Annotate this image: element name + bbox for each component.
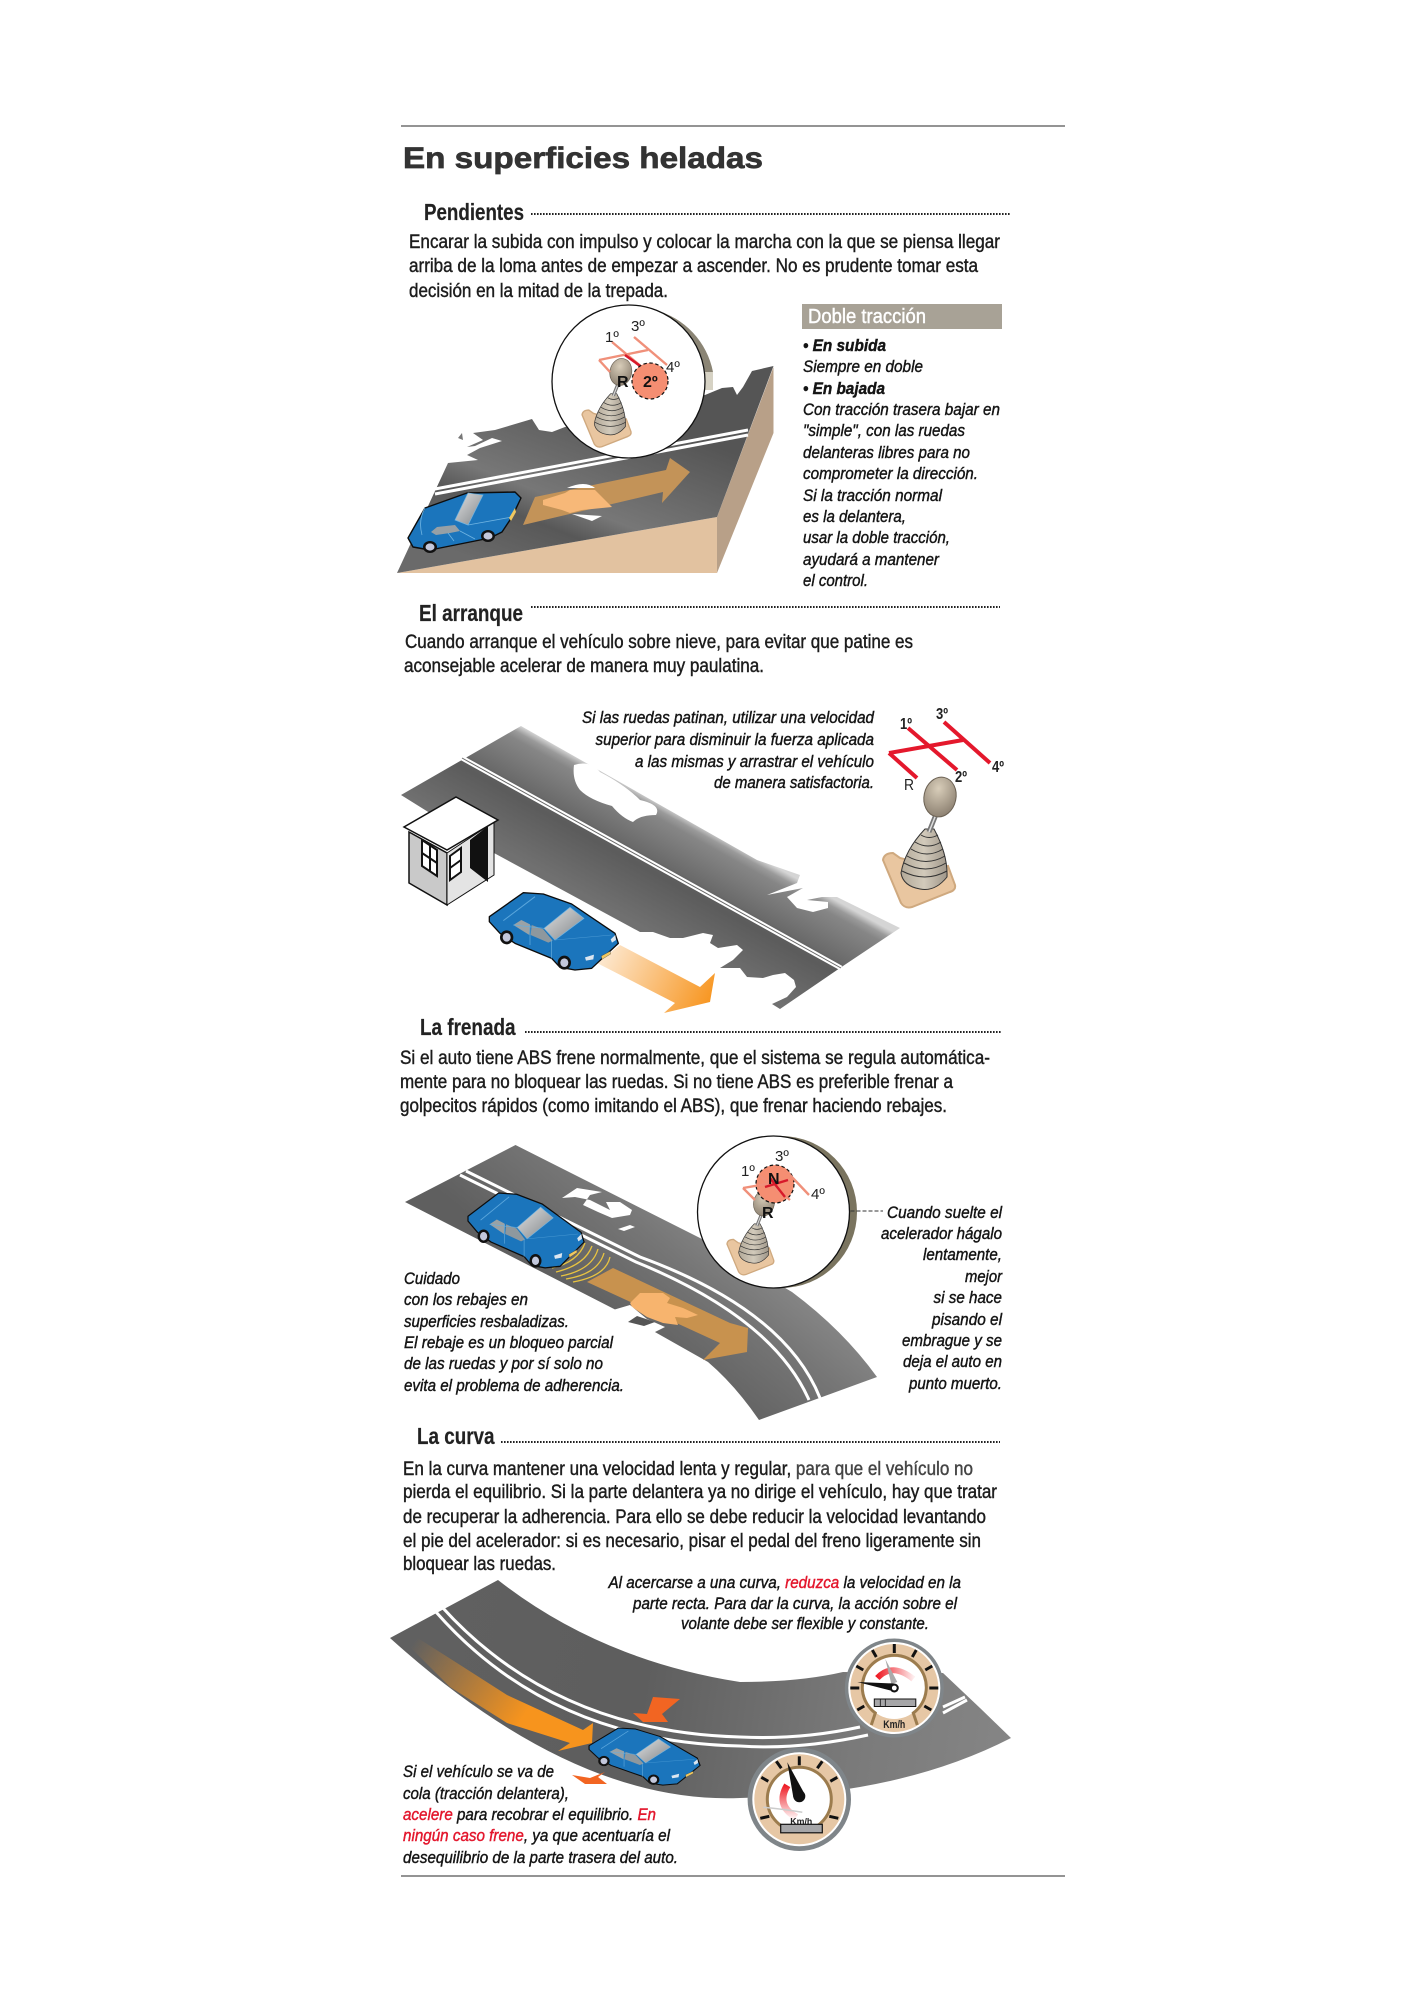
diagram: gear pattern: 2º bbox=[955, 769, 967, 786]
text block: el arranque bbox=[404, 632, 913, 677]
callout: clutch advice bbox=[881, 1204, 1003, 1393]
icon: gear shifter bbox=[883, 774, 960, 908]
text block: la frenada: mente para no bloquear las ruedas. Si no tiene ABS es preferible frenar a bbox=[400, 1072, 953, 1093]
text block: la curva: el pie del acelerador: si es necesario, pisar el pedal del freno ligeramente sin bbox=[403, 1531, 981, 1552]
arrow: braking path bbox=[587, 1268, 748, 1360]
magnifier: neutral gear: R bbox=[762, 1205, 774, 1222]
text block: la frenada bbox=[400, 1048, 990, 1117]
text block: pendientes: decisión en la mitad de la trepada. bbox=[409, 281, 668, 302]
text block: la curva: pierda el equilibrio. Si la parte delantera ya no dirige el vehículo, hay que tratar bbox=[403, 1482, 998, 1503]
diagram: gear pattern: 1º bbox=[900, 716, 912, 733]
callout: clutch advice: embrague y se bbox=[902, 1332, 1002, 1350]
text block: la frenada: Si el auto tiene ABS frene normalmente, que el sistema se regula automática- bbox=[400, 1048, 990, 1069]
magnifier: gearshift second gear: 3º bbox=[631, 318, 645, 335]
arrow: forward motion bbox=[597, 945, 715, 1013]
text block: la curva: En la curva mantener una velocidad lenta y regular, para que el vehículo no bbox=[403, 1459, 973, 1480]
arrow: side force bottom bbox=[572, 1772, 607, 1784]
sidebar text bbox=[803, 337, 1000, 590]
illustration: road curve bbox=[390, 1580, 1011, 1798]
callout: clutch advice: punto muerto. bbox=[908, 1375, 1002, 1393]
sidebar text: "simple", con las ruedas bbox=[803, 422, 965, 440]
heading: pendientes: Pendientes bbox=[424, 199, 524, 225]
sidebar text: comprometer la dirección. bbox=[803, 465, 978, 483]
sidebar text: es la delantera, bbox=[803, 508, 906, 526]
magnifier: neutral gear bbox=[698, 1136, 857, 1288]
callout: rear slide: Si el vehículo se va de bbox=[403, 1763, 554, 1781]
arrow: slope direction bbox=[523, 458, 690, 525]
icon: blue car bbox=[589, 1728, 700, 1785]
callout: downshift warning: El rebaje es un bloqueo parcial bbox=[404, 1334, 614, 1352]
callout: downshift warning: con los rebajes en bbox=[404, 1291, 528, 1309]
callout: rear slide: desequilibrio de la parte trasera del auto. bbox=[403, 1849, 678, 1867]
callout: rear slide: acelere para recobrar el equilibrio. En bbox=[403, 1806, 656, 1824]
icon: blue car bbox=[408, 492, 521, 553]
magnifier: neutral gear: 3º bbox=[775, 1148, 789, 1165]
text block: pendientes bbox=[409, 232, 1001, 302]
diagram: gear pattern bbox=[883, 706, 1004, 908]
heading: la frenada: La frenada bbox=[420, 1014, 516, 1040]
callout: approaching curve bbox=[608, 1574, 961, 1633]
callout: downshift warning: de las ruedas y por sí solo no bbox=[404, 1355, 603, 1373]
callout: rear slide bbox=[403, 1763, 678, 1867]
callout: downshift warning: evita el problema de adherencia. bbox=[404, 1377, 624, 1395]
text block: pendientes: arriba de la loma antes de empezar a ascender. No es prudente tomar esta bbox=[409, 256, 978, 277]
gauge: speedometer accelerating: Km/h bbox=[790, 1816, 812, 1826]
arrow: side force top bbox=[633, 1697, 680, 1722]
callout: clutch advice: acelerador hágalo bbox=[881, 1225, 1002, 1243]
sidebar text: • En subida bbox=[803, 337, 886, 355]
magnifier: neutral gear: 4º bbox=[811, 1186, 825, 1203]
panel: la frenada bbox=[400, 1014, 1003, 1420]
sidebar text: • En bajada bbox=[803, 380, 885, 398]
callout: wheels spinning: superior para disminuir la fuerza aplicada bbox=[596, 731, 874, 749]
callout: approaching curve: parte recta. Para dar la curva, la acción sobre el bbox=[632, 1595, 958, 1613]
text block: la curva: de recuperar la adherencia. Para ello se debe reducir la velocidad levantando bbox=[403, 1507, 986, 1528]
icon: guard booth bbox=[404, 797, 498, 905]
text block: la curva bbox=[403, 1459, 998, 1575]
text block: pendientes: Encarar la subida con impulso y colocar la marcha con la que se piensa llegar bbox=[409, 232, 1001, 253]
text block: el arranque: aconsejable acelerar de manera muy paulatina. bbox=[404, 656, 764, 677]
icon: blue car bbox=[468, 1193, 584, 1268]
magnifier: gearshift second gear: 4º bbox=[666, 359, 680, 376]
magnifier: gearshift second gear: 1º bbox=[605, 329, 619, 346]
gauge: speedometer slowing bbox=[845, 1638, 944, 1738]
callout: clutch advice: mejor bbox=[965, 1268, 1003, 1286]
sidebar text: el control. bbox=[803, 572, 868, 590]
illustration: curving road bbox=[405, 1145, 877, 1420]
sidebar text: delanteras libres para no bbox=[803, 444, 970, 462]
text block: la curva: bloquear las ruedas. bbox=[403, 1554, 556, 1575]
callout: clutch advice: si se hace bbox=[934, 1289, 1002, 1307]
sidebar header: Doble tracción bbox=[808, 306, 926, 328]
sidebar text: ayudará a mantener bbox=[803, 551, 940, 569]
heading: la curva: La curva bbox=[417, 1423, 495, 1449]
title: En superficies heladas bbox=[403, 142, 763, 175]
magnifier: neutral gear: 1º bbox=[741, 1163, 755, 1180]
text block: el arranque: Cuando arranque el vehículo sobre nieve, para evitar que patine es bbox=[405, 632, 913, 653]
callout: rear slide: cola (tracción delantera), bbox=[403, 1785, 569, 1803]
magnifier: gearshift second gear bbox=[552, 305, 713, 458]
arrow: skid direction bbox=[410, 1635, 593, 1751]
magnifier: neutral gear: N bbox=[768, 1171, 780, 1188]
callout: clutch advice: lentamente, bbox=[923, 1246, 1002, 1264]
callout: downshift warning: Cuidado bbox=[404, 1270, 460, 1288]
callout: clutch advice: pisando el bbox=[931, 1311, 1003, 1329]
callout: downshift warning bbox=[404, 1270, 624, 1395]
panel: doble traccion bbox=[802, 304, 1002, 590]
callout: wheels spinning bbox=[582, 709, 875, 792]
callout: clutch advice: Cuando suelte el bbox=[887, 1204, 1003, 1222]
callout: approaching curve: volante debe ser flexible y constante. bbox=[681, 1615, 929, 1633]
panel: la curva bbox=[390, 1423, 1011, 1867]
top rule bbox=[401, 125, 1065, 127]
sidebar text: Con tracción trasera bajar en bbox=[803, 401, 1000, 419]
sidebar header bbox=[802, 304, 1002, 329]
callout: wheels spinning: a las mismas y arrastrar el vehículo bbox=[635, 753, 874, 771]
diagram: gear pattern: 4º bbox=[992, 759, 1004, 776]
panel: el arranque bbox=[401, 600, 1004, 1013]
callout: approaching curve: Al acercarse a una curva, reduzca la velocidad en la bbox=[608, 1574, 961, 1592]
gauge: speedometer slowing: Km/h bbox=[883, 1719, 906, 1731]
callout: clutch advice: deja el auto en bbox=[903, 1353, 1002, 1371]
icon: blue car bbox=[489, 893, 618, 970]
sidebar text: usar la doble tracción, bbox=[803, 529, 950, 547]
sidebar text: Siempre en doble bbox=[803, 358, 923, 376]
bottom rule bbox=[401, 1875, 1065, 1877]
heading: el arranque: El arranque bbox=[419, 600, 523, 626]
gauge: speedometer accelerating bbox=[748, 1748, 851, 1851]
magnifier: gearshift second gear: 2º bbox=[643, 374, 658, 391]
panel: pendientes bbox=[390, 199, 1065, 1876]
callout: wheels spinning: de manera satisfactoria. bbox=[714, 774, 874, 792]
illustration: snowy road bbox=[401, 726, 900, 1009]
diagram: gear pattern: 3º bbox=[936, 706, 948, 723]
text block: la frenada: golpecitos rápidos (como imitando el ABS), que frenar haciendo rebajes. bbox=[400, 1096, 947, 1117]
callout: wheels spinning: Si las ruedas patinan, utilizar una velocidad bbox=[582, 709, 875, 727]
magnifier: gearshift second gear: R bbox=[617, 374, 629, 391]
diagram: gear pattern: R bbox=[904, 777, 914, 794]
illustration: icy slope bbox=[397, 305, 774, 573]
sidebar text: Si la tracción normal bbox=[803, 487, 943, 505]
callout: downshift warning: superficies resbaladizas. bbox=[404, 1313, 569, 1331]
callout: rear slide: ningún caso frene, ya que acentuaría el bbox=[403, 1827, 671, 1845]
